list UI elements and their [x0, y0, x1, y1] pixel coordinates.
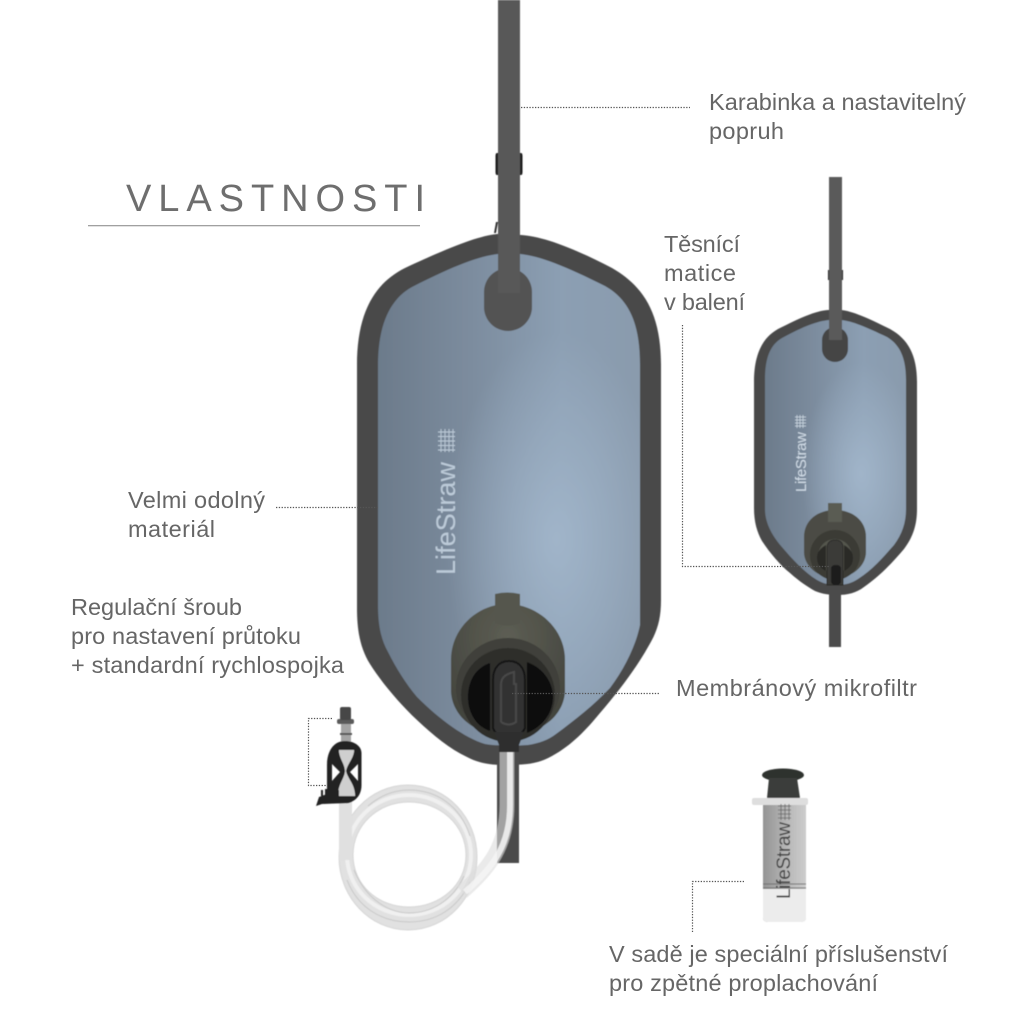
brand logo: LifeStraw — [431, 462, 461, 575]
quick connector and flow clamp — [316, 707, 362, 806]
label: backflush accessory: pro zpětné proplachování — [609, 970, 878, 996]
label: flow screw: + standardní rychlospojka — [71, 652, 345, 678]
connector head — [340, 707, 351, 720]
bag shell — [754, 310, 917, 595]
handle highlight — [501, 672, 516, 724]
label: durable material — [128, 487, 265, 542]
main water bag — [357, 0, 661, 863]
anchor — [822, 327, 848, 362]
strap buckle — [496, 153, 522, 175]
backflush syringe — [752, 768, 808, 922]
label: sealing nut: v balení — [664, 289, 745, 315]
tube through clamp — [338, 750, 355, 796]
leader: microfilter — [512, 692, 660, 694]
small bag: packed view — [754, 177, 917, 647]
top strap — [498, 0, 520, 293]
label: sealing nut: matice — [664, 260, 736, 286]
brand logo: LifeStraw — [793, 432, 810, 492]
syringe logo: LifeStraw — [774, 822, 795, 899]
barrel — [763, 805, 806, 922]
tube from valve, highlight — [465, 752, 510, 892]
connector flange — [337, 719, 354, 724]
ring coil lines — [347, 870, 470, 922]
plunger cap — [762, 768, 804, 782]
buckle — [828, 270, 843, 280]
knob handle — [493, 661, 525, 739]
knob handle — [827, 540, 843, 585]
leader: strap — [521, 106, 690, 108]
label: flow screw: Regulační šroub — [71, 594, 242, 620]
label: sealing nut: Těsnící — [664, 231, 740, 257]
valve knob — [810, 530, 860, 580]
carabiner hint — [494, 222, 498, 233]
leader: flow screw — [308, 718, 332, 786]
valve base — [804, 510, 866, 578]
title: VLASTNOSTI: VLASTNOSTI — [126, 178, 425, 220]
top anchor — [484, 268, 532, 331]
label: carabiner and strap: Karabinka a nastavitelný — [709, 89, 966, 115]
plunger seal lines — [763, 884, 806, 888]
clear lower barrel — [763, 889, 806, 922]
label: carabiner and strap — [709, 89, 966, 144]
valve tab — [828, 503, 842, 522]
top strap — [829, 177, 842, 340]
valve base — [451, 604, 565, 735]
panel glow — [765, 320, 906, 585]
bag blue panel — [378, 254, 640, 746]
bottom strap — [497, 760, 519, 863]
label: carabiner and strap: popruh — [709, 118, 784, 144]
label: flow screw: pro nastavení průtoku — [71, 623, 301, 649]
clamp body — [316, 741, 362, 806]
panel glow — [378, 254, 640, 746]
label: durable material: materiál — [128, 516, 215, 542]
leader: seal nut — [682, 325, 830, 566]
leader: material — [276, 506, 378, 508]
label: membrane microfilter: Membránový mikrofiltr — [676, 675, 917, 701]
leader: accessory — [692, 882, 744, 932]
knob black windows — [468, 662, 553, 733]
label: durable material: Velmi odolný — [128, 487, 265, 513]
coiled transparent tube — [339, 752, 510, 930]
label: flow screw — [71, 594, 345, 678]
connector pin — [341, 722, 351, 744]
ring highlight — [347, 795, 471, 915]
valve tab — [495, 592, 520, 626]
label: backflush accessory: V sadě je speciální příslušenství — [609, 941, 948, 967]
valve knob — [461, 648, 555, 742]
valve collar shadow — [456, 638, 560, 736]
blue panel — [765, 320, 906, 585]
bottom strap — [829, 590, 841, 647]
tube from valve, body — [462, 752, 507, 892]
label: sealing nut — [664, 231, 745, 315]
ring body — [339, 785, 477, 930]
syringe grid — [778, 804, 791, 820]
threaded collar — [494, 732, 524, 752]
bag outer shell — [357, 234, 661, 765]
label: backflush accessory — [609, 941, 948, 996]
clamp teeth — [322, 789, 338, 796]
knob windows — [817, 545, 853, 571]
knob inner — [818, 539, 852, 573]
flange — [752, 798, 808, 805]
tube to clamp — [339, 795, 352, 860]
plunger stem — [767, 778, 800, 798]
connector band — [340, 733, 352, 735]
handle slot — [831, 565, 841, 585]
